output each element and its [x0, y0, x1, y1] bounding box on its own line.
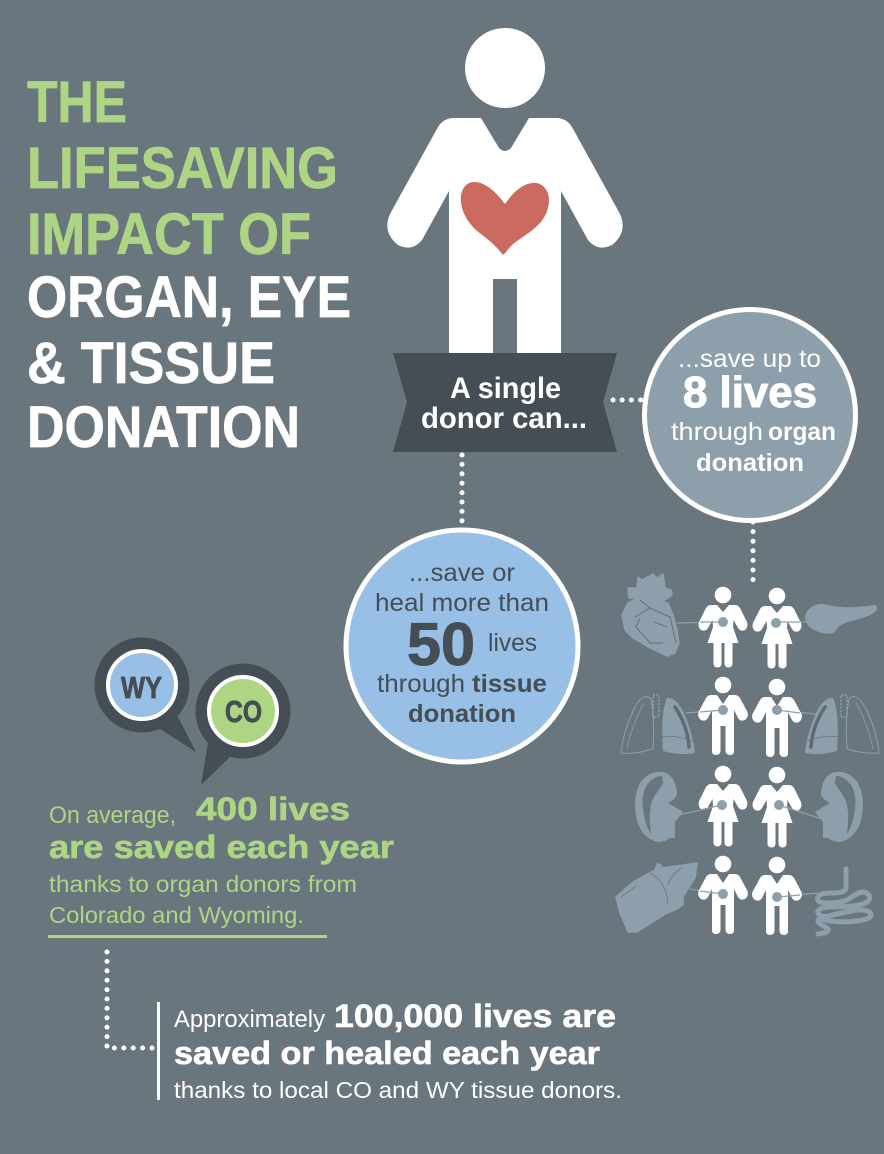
title: & TISSUE — [27, 331, 275, 396]
text: organ donors statistic: are saved each year — [49, 829, 394, 865]
panel: organ donation circle: 8 lives — [683, 368, 817, 417]
organ line overlay on figures — [700, 622, 800, 897]
icon: left lungs — [621, 695, 695, 754]
icon: WY location pin — [94, 638, 196, 752]
title: LIFESAVING — [27, 136, 338, 201]
icon: CO location pin — [196, 664, 290, 785]
panel: tissue donation circle: donation — [408, 700, 516, 728]
banner: a single donor can — [393, 353, 617, 452]
panel: tissue donation circle: ...save or — [409, 559, 515, 587]
title: THE — [27, 70, 127, 135]
organ connector lines — [675, 622, 825, 897]
icon: right kidney — [815, 772, 863, 842]
panel: organ donation circle: organ — [768, 418, 836, 446]
connector dots: organ stat to tissue stat — [107, 952, 156, 1048]
panel: tissue donation circle: tissue — [472, 670, 547, 698]
connector dots: banner to organ circle — [613, 398, 642, 402]
icon: anatomical heart — [622, 574, 679, 656]
icon: WY location pin: WY — [121, 670, 162, 705]
title: IMPACT OF — [27, 202, 311, 267]
panel: organ donation circle: through — [671, 418, 763, 446]
icon: heart — [461, 182, 549, 254]
connector dots: banner to tissue circle — [460, 455, 464, 522]
text: tissue donors statistic: thanks to local CO and WY tissue donors. — [174, 1077, 622, 1103]
icon: intestines — [818, 869, 871, 934]
icon: left kidney — [635, 772, 683, 842]
panel: tissue donation circle: through — [377, 670, 465, 698]
banner: a single donor can: A single — [450, 372, 561, 405]
panel: organ donation circle — [644, 310, 856, 520]
text: organ donors statistic: thanks to organ donors from — [49, 871, 357, 897]
title — [27, 70, 351, 460]
panel: tissue donation circle: lives — [488, 629, 537, 657]
icon: right lungs — [805, 695, 879, 754]
panel: organ donation circle: ...save up to — [678, 345, 821, 373]
text: organ donors statistic: 400 lives — [196, 791, 350, 827]
text: tissue donors statistic: saved or healed each year — [174, 1035, 600, 1071]
icon: liver — [616, 863, 697, 932]
vertical rule — [157, 1002, 160, 1100]
text: organ donors statistic: Colorado and Wyoming. — [49, 902, 304, 928]
panel: organ donation circle: donation — [696, 449, 804, 477]
title: DONATION — [27, 395, 300, 460]
icon: pancreas — [805, 604, 877, 634]
panel: tissue donation circle — [346, 530, 578, 762]
text: organ donors statistic: On average, — [49, 802, 176, 829]
title: ORGAN, EYE — [27, 265, 351, 330]
small figures: recipients — [698, 587, 802, 935]
text: tissue donors statistic: 100,000 lives are — [334, 998, 616, 1034]
panel: tissue donation circle: heal more than — [375, 589, 549, 617]
banner: a single donor can: donor can... — [421, 402, 587, 435]
panel: tissue donation circle: 50 — [407, 611, 475, 678]
text: tissue donors statistic — [174, 998, 622, 1103]
connector dots: organ circle to figures — [750, 522, 756, 582]
text: tissue donors statistic: Approximately — [174, 1006, 325, 1033]
icon: CO location pin: CO — [225, 694, 262, 729]
text: organ donors statistic — [48, 791, 394, 938]
icon: donor figure with heart — [387, 28, 623, 353]
transplant markers on figures — [717, 617, 784, 902]
